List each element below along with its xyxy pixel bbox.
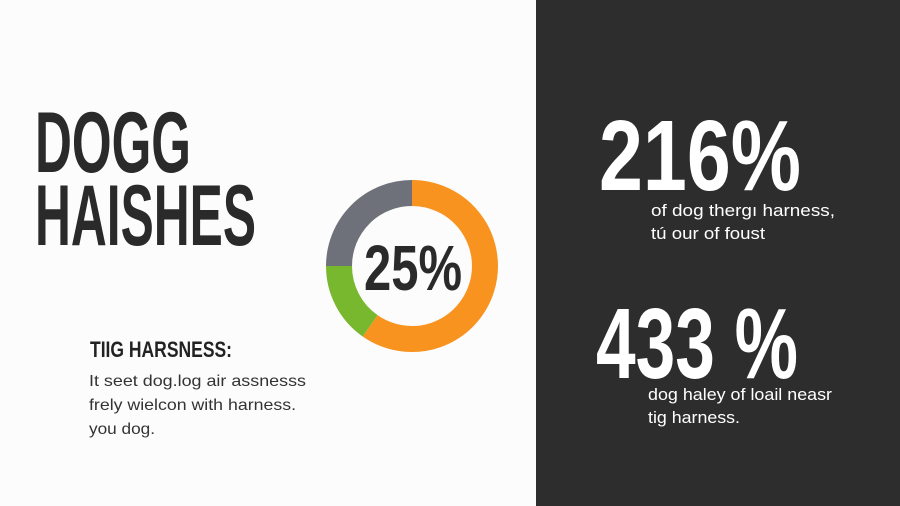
text block: description: you dog. — [89, 421, 155, 438]
stat: 216%: tú our of foust — [651, 224, 765, 243]
text block: description: frely wielcon with harness. — [89, 397, 296, 414]
stat: 433%: 433 % — [596, 288, 798, 400]
title: HAISHES — [35, 168, 256, 264]
title: DOGG — [35, 95, 191, 191]
stat: 433%: dog haley of loail neasr — [648, 385, 832, 404]
stat: 216%: of dog thergı harness, — [651, 201, 835, 220]
panel: dark stats — [536, 0, 900, 506]
title — [35, 95, 256, 264]
text block: description: It seet dog.log air assnesss — [89, 373, 306, 390]
chart: donut — [339, 193, 485, 339]
stat: 216%: 216% — [599, 100, 801, 212]
text block: description — [89, 373, 306, 438]
chart: donut: 25% — [364, 232, 462, 304]
stat: 433% — [596, 288, 832, 427]
subheading: TIIG HARSNESS: — [90, 337, 232, 362]
stat: 433%: tig harness. — [648, 408, 740, 427]
